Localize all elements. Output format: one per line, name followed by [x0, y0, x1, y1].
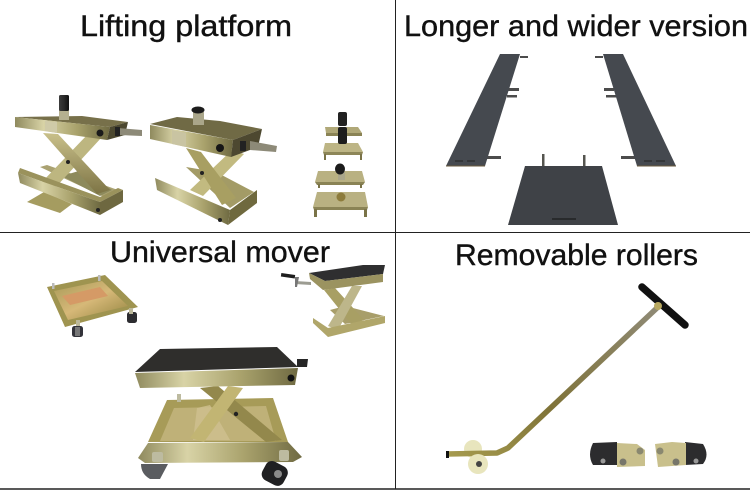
- icon: jack on wheeled dolly: [135, 347, 308, 488]
- heading: universal mover: Universal mover: [110, 236, 330, 269]
- icon: scissor jack lowered: [150, 106, 277, 225]
- panel: removable rollers photos: [446, 287, 706, 474]
- icon: disassembled jack parts: [313, 112, 368, 217]
- heading: longer and wider version: Longer and wider version: [404, 10, 748, 43]
- icon: scissor jack raised: [15, 95, 142, 215]
- icon: right extension board: [595, 54, 676, 166]
- icon: left roller pair block: [590, 442, 645, 467]
- panel: longer and wider boards: [446, 54, 676, 225]
- icon: left extension board: [446, 54, 528, 166]
- icon: roller handle: [446, 287, 685, 474]
- icon: crank jack: [281, 265, 385, 337]
- panel: lifting platform photos: [15, 95, 368, 225]
- heading: removable rollers: Removable rollers: [455, 239, 698, 272]
- icon: dolly tray: [47, 275, 138, 337]
- icon: right roller pair block: [655, 442, 706, 467]
- heading: lifting platform: Lifting platform: [80, 10, 292, 43]
- panel: universal mover photos: [47, 265, 385, 488]
- icon: center plate: [508, 154, 618, 225]
